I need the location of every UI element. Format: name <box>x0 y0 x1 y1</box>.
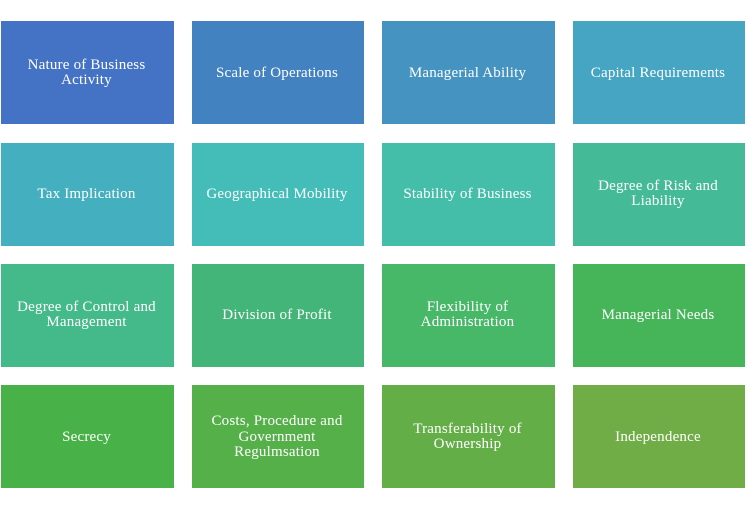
box: Nature of Business Activity: Activity <box>61 72 112 88</box>
box: Managerial Needs: Managerial Needs <box>602 307 714 323</box>
box: Geographical Mobility: Geographical Mobility <box>206 186 348 202</box>
box: Costs, Procedure and Government Regulmsation: Costs, Procedure and <box>211 413 343 429</box>
box: Degree of Control and Management <box>1 264 174 367</box>
box: Transferability of Ownership: Ownership <box>434 436 501 452</box>
box: Costs, Procedure and Government Regulmsation <box>192 385 364 488</box>
box: Managerial Ability <box>382 21 555 124</box>
box: Division of Profit <box>192 264 364 367</box>
box: Managerial Needs <box>573 264 745 367</box>
box: Tax Implication <box>1 143 174 246</box>
box: Scale of Operations: Scale of Operations <box>216 65 338 81</box>
box: Capital Requirements: Capital Requirements <box>591 65 725 81</box>
box: Degree of Control and Management: Management <box>46 314 127 330</box>
box: Stability of Business <box>382 143 555 246</box>
box: Costs, Procedure and Government Regulmsation: Regulmsation <box>234 444 320 460</box>
box: Transferability of Ownership: Transferability of <box>413 420 522 436</box>
box: Managerial Ability: Managerial Ability <box>409 65 526 81</box>
box: Flexibility of Administration <box>382 264 555 367</box>
box: Degree of Risk and Liability: Degree of Risk and <box>598 178 718 194</box>
box: Tax Implication: Tax Implication <box>37 186 136 202</box>
box: Stability of Business: Stability of Business <box>403 186 532 202</box>
box: Independence: Independence <box>615 429 701 445</box>
box: Degree of Risk and Liability <box>573 143 745 246</box>
box: Secrecy: Secrecy <box>62 429 111 445</box>
box: Nature of Business Activity <box>1 21 174 124</box>
box: Degree of Risk and Liability: Liability <box>631 192 685 208</box>
box: Division of Profit: Division of Profit <box>222 307 332 323</box>
box: Scale of Operations <box>192 21 364 124</box>
box: Capital Requirements <box>573 21 745 124</box>
box: Flexibility of Administration: Flexibility of <box>427 298 508 314</box>
box: Geographical Mobility <box>192 143 364 246</box>
box: Independence <box>573 385 745 488</box>
box: Flexibility of Administration: Administration <box>421 314 514 330</box>
box: Secrecy <box>1 385 174 488</box>
box: Nature of Business Activity: Nature of Business <box>28 56 145 72</box>
box: Degree of Control and Management: Degree of Control and <box>17 298 156 314</box>
box: Costs, Procedure and Government Regulmsation: Government <box>238 429 315 445</box>
box: Transferability of Ownership <box>382 385 555 488</box>
